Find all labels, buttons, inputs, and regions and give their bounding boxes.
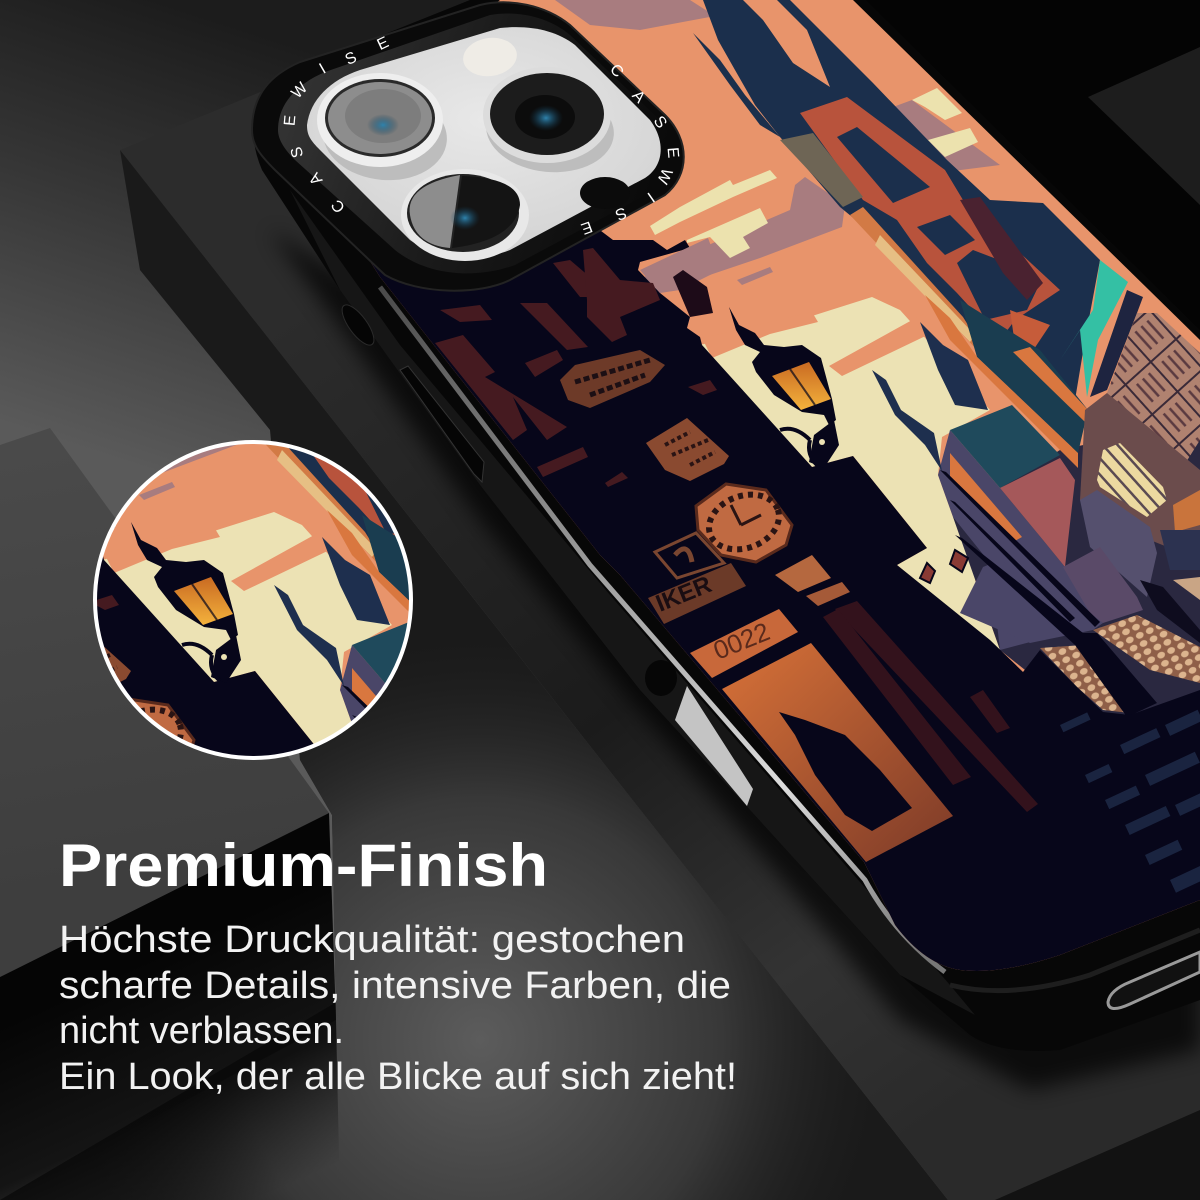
island black bezel [252, 2, 684, 291]
purple walls under the buildings [938, 430, 1103, 650]
cobblestones [1040, 615, 1200, 713]
CASEWISE ring text: S [650, 113, 670, 132]
body text: Höchste Druckqualität: gestochen [59, 919, 685, 961]
poster silhouette [779, 712, 912, 831]
dark red bars [823, 601, 1038, 812]
ring face [278, 14, 674, 273]
microphone / lidar [580, 177, 630, 209]
heading: Premium-Finish [59, 832, 548, 899]
sign: small plaque [775, 555, 831, 592]
teal roof [1060, 260, 1128, 397]
side button dark notch [645, 660, 677, 696]
icon: volume button [400, 366, 484, 482]
lens bottom [401, 169, 529, 261]
dark foreground wall [300, 130, 1200, 1000]
CASEWISE ring text: S [343, 49, 360, 69]
black lamp posts [940, 470, 1157, 717]
clouds [555, 0, 1000, 650]
CASEWISE ring text: E [282, 115, 299, 127]
CASEWISE ring text: I [644, 188, 657, 205]
case silhouette [254, 0, 1200, 1051]
cream lower sky [700, 297, 1000, 650]
top right black area [840, 0, 1200, 400]
sign: hanging plaque [646, 418, 729, 481]
small distant lamps [920, 550, 968, 583]
magnified detail circle [93, 440, 413, 760]
CASEWISE ring text: C [606, 61, 627, 81]
sign: clock [696, 484, 792, 562]
orange bands [925, 295, 1088, 542]
signs [560, 350, 1038, 862]
street background filler [953, 440, 1200, 714]
sign: K plaque [648, 563, 746, 624]
left rim highlight [380, 287, 945, 972]
platform: lower left block top face [0, 428, 329, 977]
artwork on phone back [300, 0, 1200, 1000]
CASEWISE ring text: A [628, 87, 648, 107]
platform: lower left block front face [0, 813, 340, 1200]
maroon pixel ruin [435, 238, 720, 487]
CASEWISE ring text: S [613, 203, 629, 223]
CASEWISE ring text: W [653, 165, 675, 187]
camera island [252, 2, 684, 291]
case shadow [270, 230, 1200, 1090]
flash [461, 34, 519, 80]
sign: K plaque: IKER [652, 571, 715, 618]
body text: Ein Look, der alle Blicke auf sich zieht! [59, 1056, 737, 1098]
sign: top ornate [560, 350, 665, 408]
sign: black frame [655, 533, 724, 578]
tower [693, 0, 1100, 430]
teal square building [950, 405, 1060, 488]
icon: charging port [1108, 952, 1200, 1009]
icon: side button silver [675, 686, 753, 806]
magnified artwork [97, 444, 409, 744]
CASEWISE ring text: E [375, 34, 392, 54]
street stones [1060, 710, 1200, 893]
sky [300, 0, 1200, 1000]
poster [722, 643, 953, 862]
CASEWISE ring text: I [317, 61, 329, 78]
lens top left [317, 73, 451, 185]
phone body [254, 0, 1200, 1090]
CASEWISE ring text: W [288, 79, 312, 102]
case side band [290, 190, 975, 1015]
CASEWISE ring text: A [306, 169, 326, 188]
circle border [95, 442, 411, 758]
CASEWISE ring text: S [288, 145, 307, 160]
platform: main block side face [0, 150, 948, 1200]
bottom right dark corner [995, 1110, 1200, 1200]
lens top right [483, 67, 617, 177]
icon: side port [337, 300, 379, 350]
CASEWISE ring text [282, 34, 681, 237]
CASEWISE ring text: E [664, 147, 681, 159]
platform: top right block [1088, 47, 1200, 205]
person silhouette [1140, 580, 1200, 643]
spires in the distance [872, 322, 988, 471]
CASEWISE ring text: E [579, 217, 594, 237]
body text: scharfe Details, intensive Farben, die [59, 965, 731, 1007]
sign: orange number plate [690, 609, 798, 678]
bottom case gloss [950, 930, 1200, 991]
sign frame glyph [675, 549, 692, 562]
teal navy band [960, 300, 1088, 453]
sign: orange number plate: 0022 [709, 616, 774, 666]
CASEWISE ring text: C [328, 196, 349, 216]
body text [59, 919, 737, 1098]
left thin spire [693, 33, 780, 137]
right facade buildings [960, 290, 1200, 643]
pink building [1000, 458, 1075, 567]
lantern [729, 307, 839, 468]
silver plate [307, 27, 661, 258]
sign: bracket [806, 582, 850, 606]
body text: nicht verblassen. [59, 1010, 344, 1052]
